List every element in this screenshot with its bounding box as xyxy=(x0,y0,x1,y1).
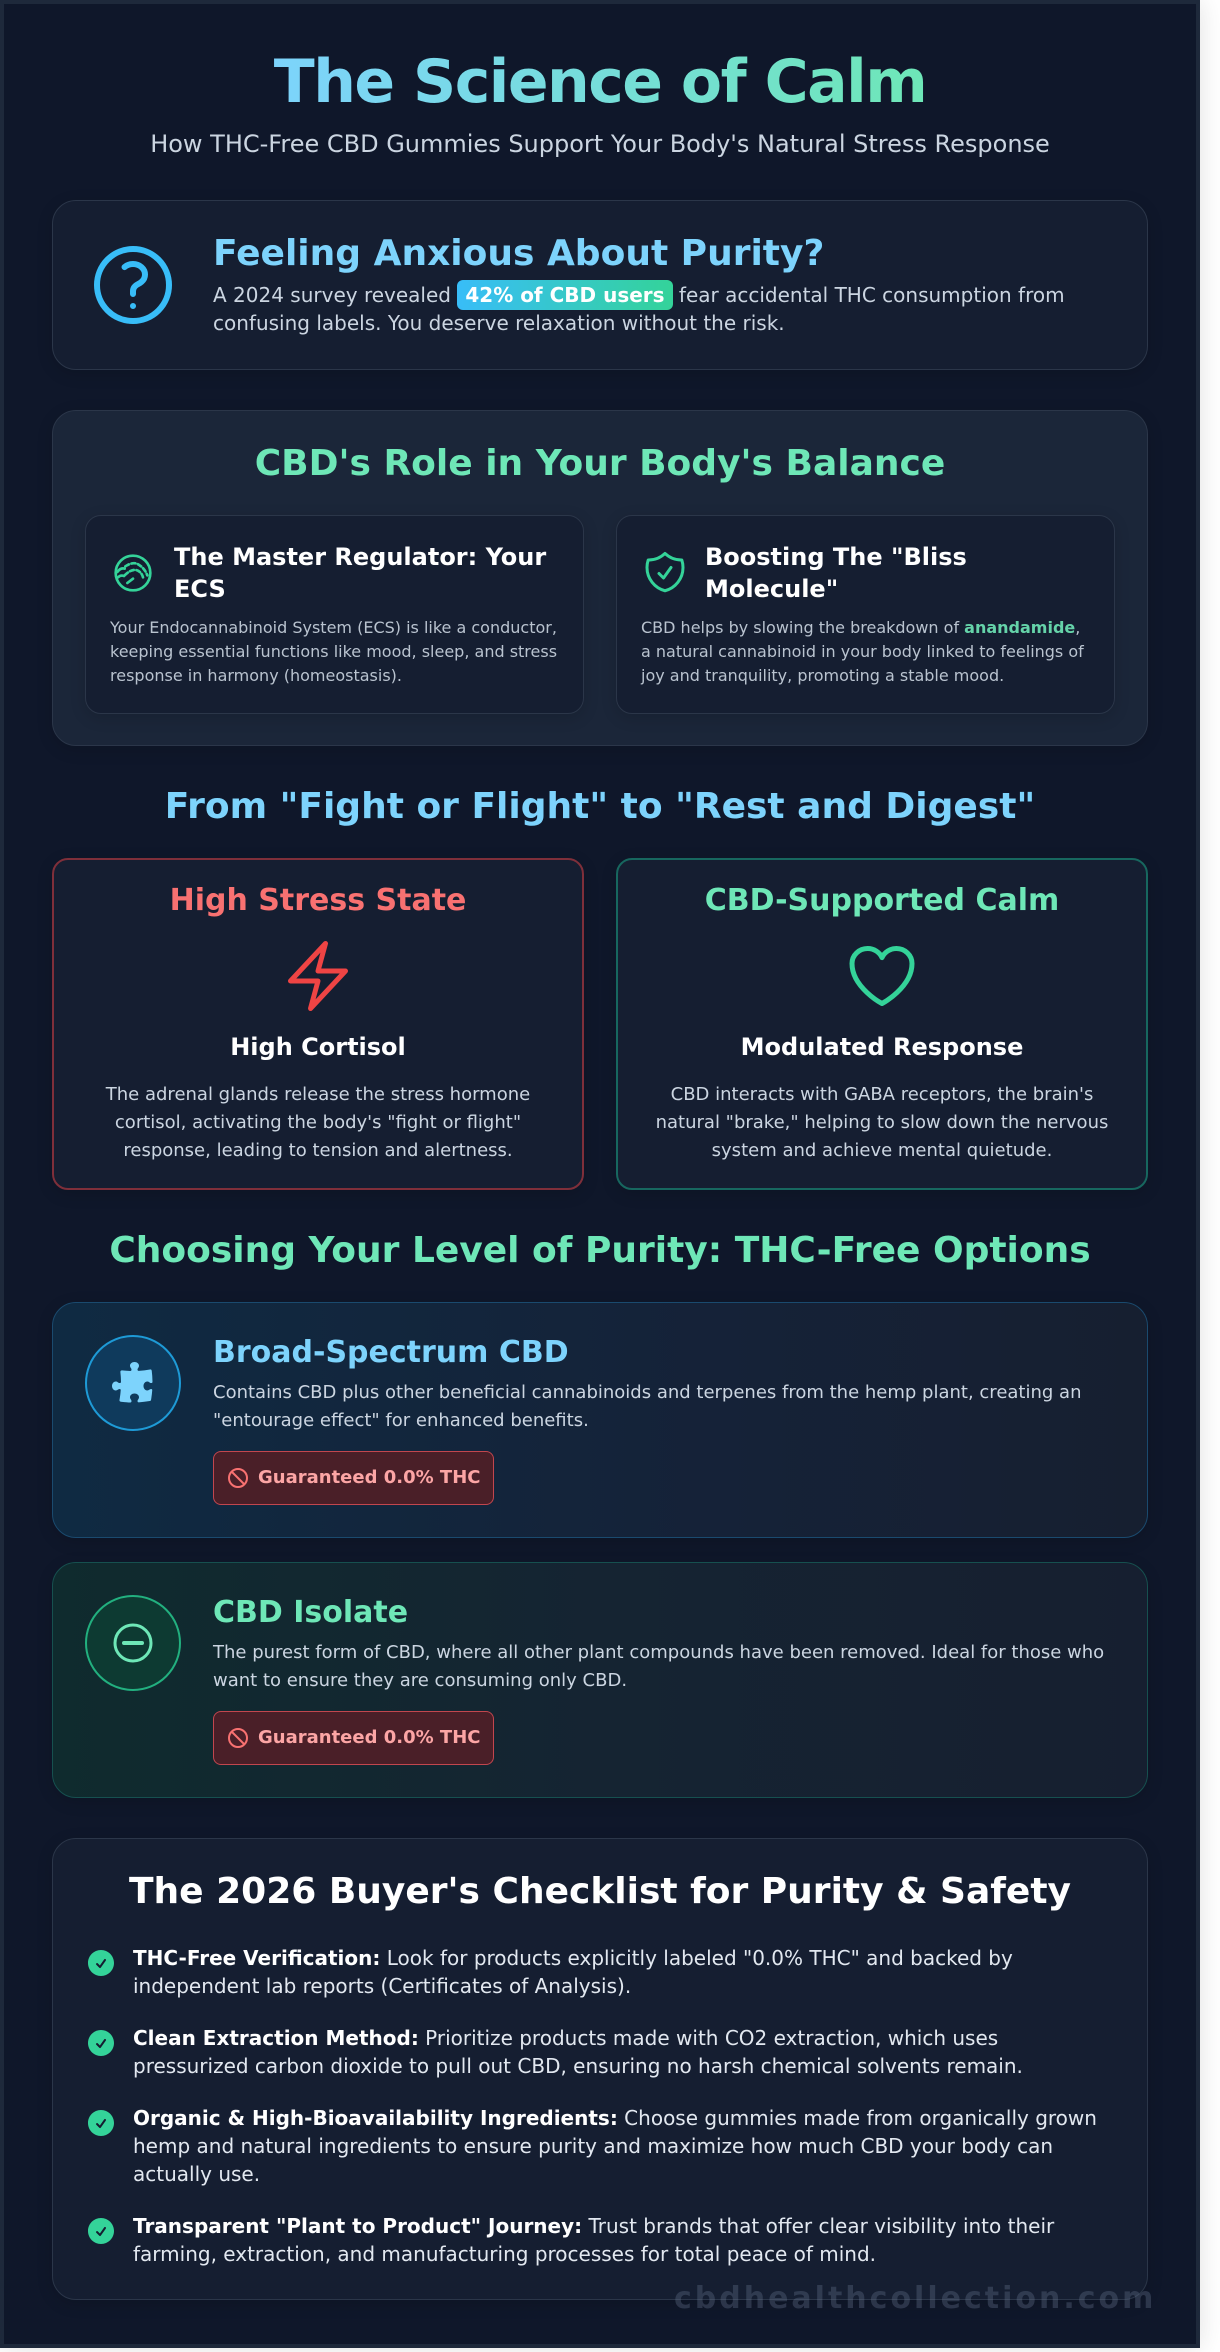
subtitle: How THC-Free CBD Gummies Support Your Body's Natural Stress Response xyxy=(150,130,1050,158)
badge: guaranteed THC: Guaranteed 0.0% THC xyxy=(258,1467,480,1488)
text: survey statistic: A 2024 survey revealed fear accidental THC consumption from xyxy=(213,283,1065,307)
icon: check xyxy=(88,2218,114,2244)
heading: high stress: High Stress State xyxy=(170,883,466,918)
item: organic ingredients: Organic & High-Bioavailability Ingredients: Choose gummies made from organically grown xyxy=(133,2106,1097,2130)
text: ECS description: response in harmony (homeostasis). xyxy=(110,666,402,685)
item: plant to product: Transparent "Plant to Product" Journey: Trust brands that offer clear visibility into their xyxy=(133,2214,1054,2238)
panel: high stress xyxy=(52,858,584,1190)
heading: supported calm: CBD-Supported Calm xyxy=(705,883,1059,918)
text: ECS description xyxy=(110,618,557,685)
text: survey statistic xyxy=(213,280,1065,335)
text: ECS description: keeping essential functions like mood, sleep, and stress xyxy=(110,642,557,661)
title: The Science of Calm xyxy=(274,47,926,117)
heading: broad-spectrum: Broad-Spectrum CBD xyxy=(213,1335,569,1370)
icon: check xyxy=(88,2030,114,2056)
item: clean extraction xyxy=(88,2026,1023,2078)
item: THC-free verification xyxy=(88,1946,1013,1998)
watermark: cbdhealthcollection.com xyxy=(674,2281,1156,2316)
item: organic ingredients: hemp and natural ingredients to ensure purity and maximize how much CBD your body can xyxy=(133,2134,1053,2158)
label: modulated response: Modulated Response xyxy=(741,1033,1023,1061)
heading: feeling anxious: Feeling Anxious About Purity? xyxy=(213,233,824,274)
text: isolate description: The purest form of CBD, where all other plant compounds have been removed. Ideal for those who xyxy=(213,1642,1104,1663)
heading: fight or flight: From "Fight or Flight" to "Rest and Digest" xyxy=(165,786,1035,827)
item: organic ingredients xyxy=(88,2106,1097,2186)
text: survey statistic: confusing labels. You deserve relaxation without the risk. xyxy=(213,311,785,335)
text: anandamide description xyxy=(640,618,1084,685)
icon: puzzle piece xyxy=(85,1335,181,1431)
icon: check xyxy=(88,2110,114,2136)
heading: level of purity: Choosing Your Level of Purity: THC-Free Options xyxy=(109,1230,1091,1271)
icon: ECS globe xyxy=(114,554,152,592)
icon: minus circle xyxy=(85,1595,181,1691)
text: anandamide description: joy and tranquility, promoting a stable mood. xyxy=(641,666,1004,685)
item: clean extraction: Clean Extraction Method: Prioritize products made with CO2 extraction, which uses xyxy=(133,2026,998,2050)
badge: guaranteed THC: Guaranteed 0.0% THC xyxy=(258,1727,480,1748)
panel: broad-spectrum xyxy=(52,1302,1148,1538)
heading: bliss molecule xyxy=(705,543,967,603)
text: anandamide description: a natural cannabinoid in your body linked to feelings of xyxy=(641,642,1084,661)
icon: shield check xyxy=(646,552,684,592)
heading: master regulator xyxy=(174,543,546,603)
icon: heart xyxy=(850,946,914,1006)
text: cortisol description xyxy=(106,1084,530,1161)
text: cortisol description: response, leading to tension and alertness. xyxy=(123,1140,513,1161)
item: THC-free verification: independent lab reports (Certificates of Analysis). xyxy=(133,1974,631,1998)
text: anandamide description: CBD helps by slowing the breakdown of anandamide, xyxy=(641,618,1080,637)
text: GABA description xyxy=(656,1084,1108,1161)
panel: buyer's checklist xyxy=(52,1838,1148,2300)
text: cortisol description: The adrenal glands release the stress hormone xyxy=(106,1084,530,1105)
heading: isolate: CBD Isolate xyxy=(213,1595,408,1630)
text: GABA description: system and achieve mental quietude. xyxy=(712,1140,1052,1161)
heading: master regulator: The Master Regulator: Your xyxy=(174,543,546,571)
panel: isolate xyxy=(52,1562,1148,1798)
item: organic ingredients: actually use. xyxy=(133,2162,260,2186)
icon: lightning bolt xyxy=(288,941,348,1011)
item: clean extraction: pressurized carbon dioxide to pull out CBD, ensuring no harsh chemical solvents remain. xyxy=(133,2054,1023,2078)
heading: buyer's checklist: The 2026 Buyer's Checklist for Purity & Safety xyxy=(129,1871,1071,1912)
text: survey statistic: 42% of CBD users xyxy=(465,283,665,307)
heading: bliss molecule: Boosting The "Bliss xyxy=(705,543,967,571)
text: ECS description: Your Endocannabinoid System (ECS) is like a conductor, xyxy=(110,618,557,637)
icon: check xyxy=(88,1950,114,1976)
card: bliss molecule xyxy=(616,515,1115,714)
card: master regulator xyxy=(85,515,584,714)
text: cortisol description: cortisol, activating the body's "fight or flight" xyxy=(115,1112,521,1133)
badge: guaranteed THC xyxy=(213,1451,494,1505)
text: broad-spectrum description xyxy=(213,1382,1081,1431)
text: isolate description xyxy=(212,1642,1104,1691)
heading: CBD's role: CBD's Role in Your Body's Balance xyxy=(255,443,945,484)
panel: anxious about purity xyxy=(52,200,1148,370)
panel: CBD's role xyxy=(52,410,1148,746)
text: broad-spectrum description: Contains CBD plus other beneficial cannabinoids and terpenes from the hemp plant, creating an xyxy=(213,1382,1081,1403)
item: plant to product xyxy=(88,2214,1054,2266)
text: GABA description: natural "brake," helping to slow down the nervous xyxy=(656,1112,1108,1133)
label: high cortisol: High Cortisol xyxy=(230,1033,406,1061)
item: plant to product: farming, extraction, and manufacturing processes for total peace of mind. xyxy=(133,2242,876,2266)
panel: CBD-supported calm xyxy=(616,858,1148,1190)
icon: question mark circle xyxy=(94,246,172,324)
text: isolate description: want to ensure they are consuming only CBD. xyxy=(213,1670,627,1691)
heading: bliss molecule: Molecule" xyxy=(705,575,838,603)
text: broad-spectrum description: "entourage effect" for enhanced benefits. xyxy=(213,1410,589,1431)
badge: guaranteed THC xyxy=(213,1711,494,1765)
text: GABA description: CBD interacts with GABA receptors, the brain's xyxy=(671,1084,1093,1105)
item: THC-free verification: THC-Free Verification: Look for products explicitly labeled "0.0% THC" and backed by xyxy=(133,1946,1013,1970)
heading: master regulator: ECS xyxy=(174,575,226,603)
